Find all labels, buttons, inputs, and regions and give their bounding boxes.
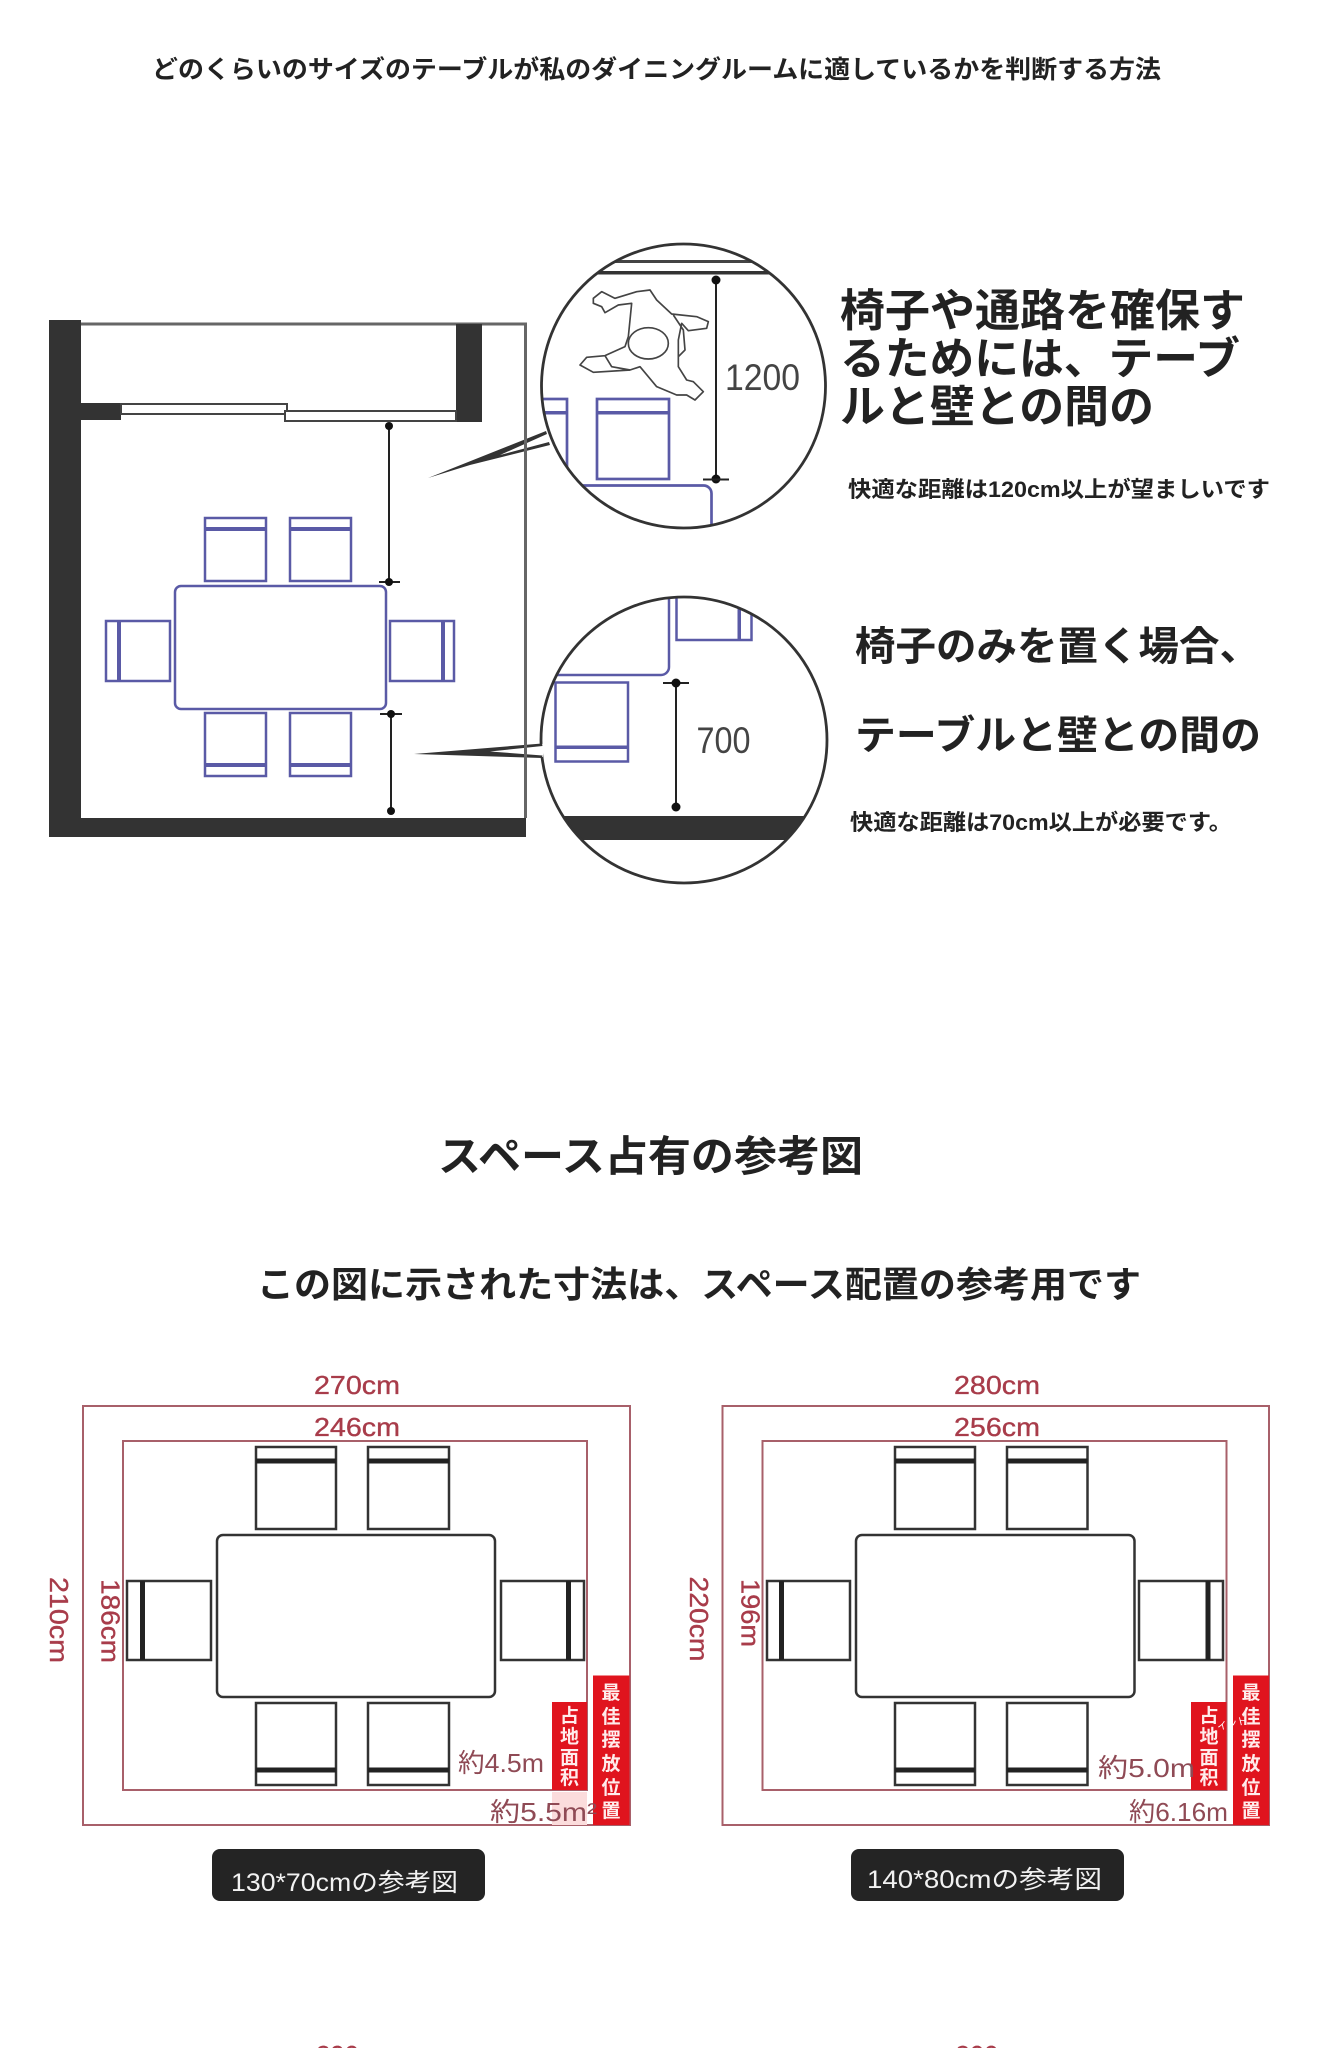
red tag: best placement: 摆 xyxy=(1241,1729,1261,1751)
table and chairs xyxy=(127,1447,584,1785)
red tag: best placement xyxy=(1233,1676,1269,1825)
footprint areas: 約5.0m xyxy=(1098,1753,1195,1783)
callout pointer: upper xyxy=(428,431,550,478)
footprint areas: 約5.5m² xyxy=(490,1797,597,1827)
red tag: best placement: 置 xyxy=(1241,1801,1261,1822)
upper dimension line xyxy=(379,422,400,586)
red tag: best placement: 放 xyxy=(601,1753,621,1775)
footprint areas xyxy=(458,1748,597,1827)
text block: 70cm clearance xyxy=(850,625,1261,835)
red tag: footprint xyxy=(1191,1702,1226,1790)
text block: 70cm clearance: テーブルと壁との間の xyxy=(855,714,1261,758)
width and height labels: 196m xyxy=(736,1579,766,1647)
small overlay text: イント xyxy=(1216,1716,1248,1733)
red tag: footprint xyxy=(552,1702,587,1790)
red tag: footprint: 面 xyxy=(1199,1748,1219,1769)
width and height labels: 210cm xyxy=(44,1577,74,1663)
zoom circle: 700 clearance detail: 700 xyxy=(696,720,750,761)
red tag: best placement: 置 xyxy=(601,1801,621,1822)
sliding window xyxy=(121,404,456,421)
lower dimension line xyxy=(380,710,402,815)
text block: 120cm clearance: 椅子や通路を確保す xyxy=(840,287,1245,336)
table and chairs xyxy=(767,1447,1223,1785)
width and height labels: 186cm xyxy=(96,1579,126,1663)
section subheading: この図に示された寸法は、スペース配置の参考用です xyxy=(257,1264,1141,1305)
caption button: 140*80cmの参考図 xyxy=(867,1866,1102,1894)
width and height labels: 270cm xyxy=(314,1370,400,1400)
text block: 120cm clearance: ルと壁との間の xyxy=(840,383,1154,432)
width and height labels: 280cm xyxy=(954,1370,1040,1400)
zoom circle: 1200 clearance detail xyxy=(540,242,827,530)
red tag: footprint: 地 xyxy=(1199,1726,1219,1748)
text block: 120cm clearance: るためには、テーブ xyxy=(840,335,1240,384)
text block: 70cm clearance: 椅子のみを置く場合、 xyxy=(855,625,1260,669)
text block: 70cm clearance: 快適な距離は70cm以上が必要です。 xyxy=(850,810,1232,835)
red tag: best placement: 放 xyxy=(1241,1753,1261,1775)
section heading: スペース占有の参考図 xyxy=(438,1133,863,1180)
dimension boxes xyxy=(722,1406,1269,1825)
caption button xyxy=(212,1849,485,1901)
red tag: footprint: 地 xyxy=(560,1726,579,1748)
red tag: best placement: 佳 xyxy=(1241,1706,1261,1728)
red tag: best placement: 最 xyxy=(1241,1683,1261,1704)
red tag: best placement: 最 xyxy=(601,1683,621,1704)
width and height labels: 220cm xyxy=(684,1577,714,1661)
footprint areas: 約6.16m xyxy=(1129,1797,1228,1827)
caption button xyxy=(851,1849,1124,1901)
text block: 120cm clearance: 快適な距離は120cm以上が望ましいです xyxy=(848,477,1270,502)
footprint areas: 約4.5m xyxy=(458,1748,544,1778)
width and height labels: 246cm xyxy=(314,1412,400,1442)
width and height labels xyxy=(44,1370,400,1663)
red tag: footprint: 占 xyxy=(1199,1705,1219,1727)
width and height labels xyxy=(684,1370,1040,1662)
dimension boxes xyxy=(83,1406,630,1825)
red tag: footprint: 积 xyxy=(560,1767,579,1789)
red tag: best placement: 佳 xyxy=(601,1706,621,1728)
room walls xyxy=(49,320,526,837)
panel: 130x70 layout xyxy=(44,1370,630,1901)
red tag: best placement: 位 xyxy=(1241,1777,1261,1799)
table and six chairs xyxy=(106,518,454,776)
red tag: best placement: 位 xyxy=(601,1777,621,1799)
footprint areas xyxy=(1098,1753,1228,1827)
red tag: best placement xyxy=(593,1676,630,1825)
red tag: footprint: 面 xyxy=(560,1748,579,1769)
callout pointer: lower xyxy=(414,744,542,758)
red tag: best placement: 摆 xyxy=(601,1729,621,1751)
title: どのくらいのサイズのテーブルが私のダイニングルームに適しているかを判断する方法 xyxy=(152,55,1161,84)
zoom circle: 700 clearance detail xyxy=(540,596,828,884)
caption button: 130*70cmの参考図 xyxy=(231,1869,458,1897)
floor plan xyxy=(49,320,526,837)
red tag: footprint: 占 xyxy=(560,1705,579,1727)
text block: 120cm clearance xyxy=(840,287,1270,502)
panel: 140x80 layout xyxy=(684,1370,1269,1901)
zoom circle: 1200 clearance detail: 1200 xyxy=(725,357,800,398)
width and height labels: 256cm xyxy=(954,1412,1040,1442)
red tag: footprint: 积 xyxy=(1199,1767,1219,1789)
